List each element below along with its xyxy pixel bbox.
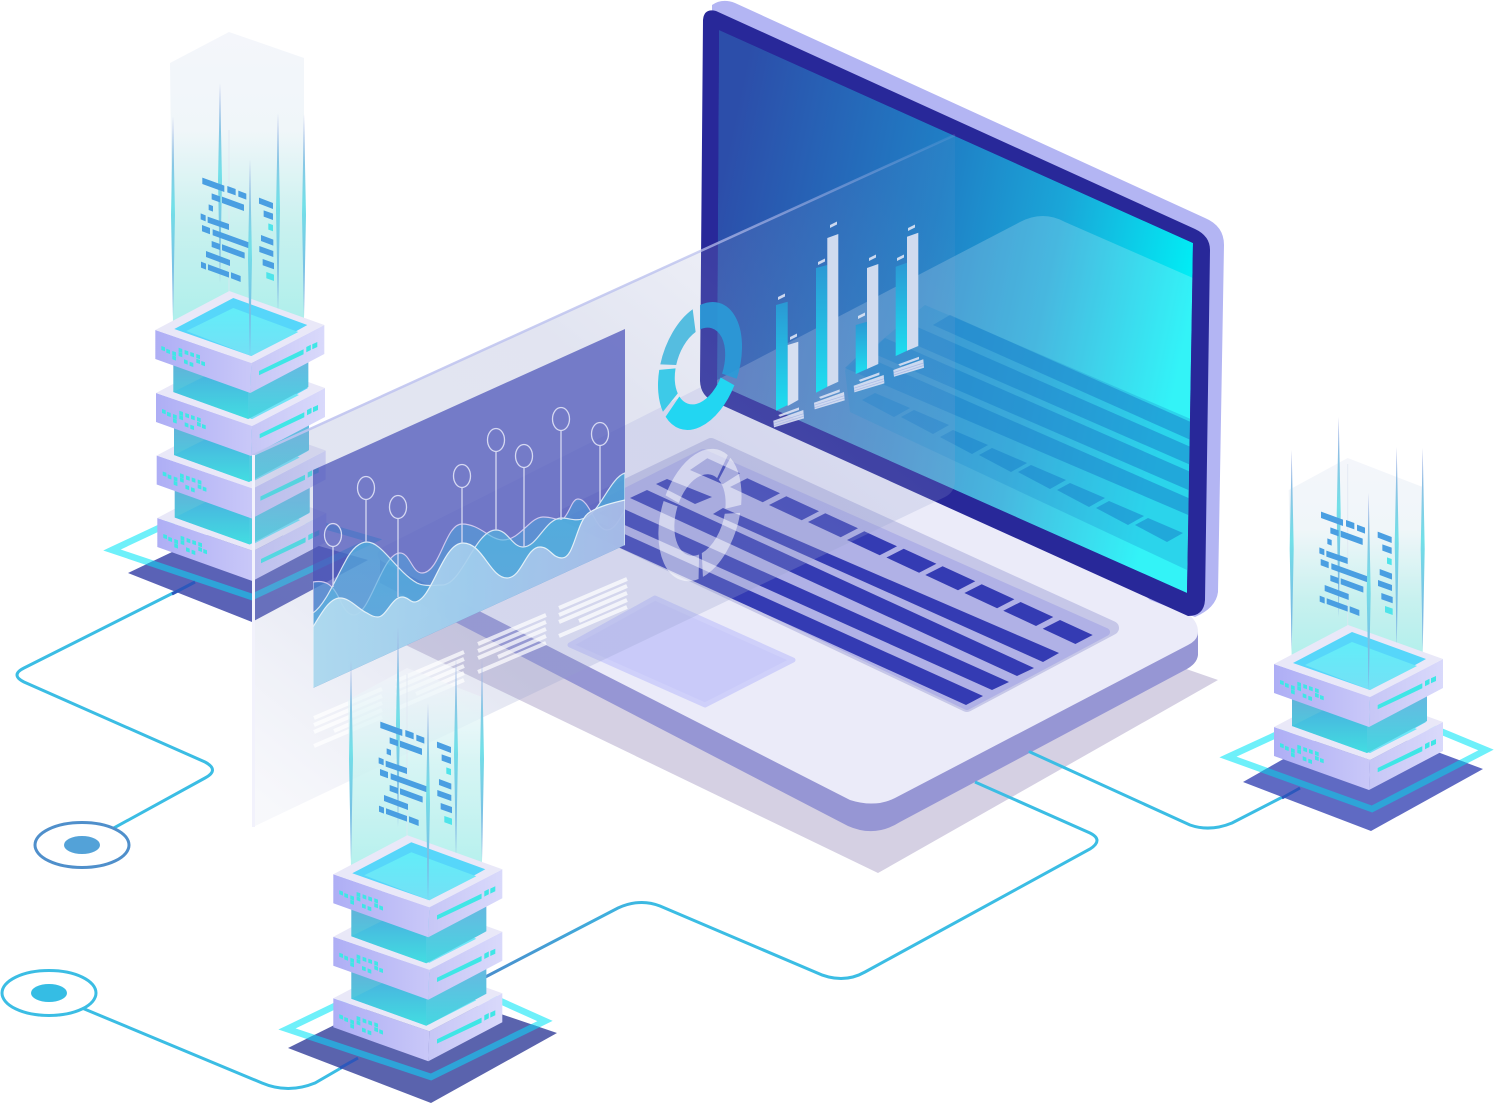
data beam xyxy=(348,627,484,904)
reflected keyboard xyxy=(845,305,1193,570)
node two xyxy=(2,970,96,1016)
laptop base side xyxy=(380,555,1198,831)
server units xyxy=(1274,684,1443,790)
bar axis labels xyxy=(773,357,924,427)
laptop ground shadow xyxy=(385,500,1218,873)
platform xyxy=(287,965,557,1103)
panel text lines xyxy=(314,579,627,746)
platform xyxy=(104,520,382,622)
reflected ring on keyboard xyxy=(666,448,734,582)
screen back lid xyxy=(712,1,1224,617)
keyboard recess xyxy=(566,445,1112,706)
bar value marks xyxy=(778,222,915,340)
area waves xyxy=(313,473,625,700)
connector wires xyxy=(17,582,1300,1088)
data beam xyxy=(1289,417,1425,694)
wire to right server xyxy=(1030,752,1300,828)
server units xyxy=(333,894,502,1061)
top server unit xyxy=(155,159,324,393)
bars xyxy=(776,233,918,411)
server units xyxy=(156,350,326,581)
laptop xyxy=(378,1,1224,831)
reflected laptop base xyxy=(717,216,1193,593)
data beam xyxy=(170,32,306,360)
laptop base top surface xyxy=(378,385,1198,804)
translucent floating panel xyxy=(253,135,955,827)
server stack left xyxy=(112,32,373,622)
keyboard long key rows xyxy=(583,490,1059,705)
screen display xyxy=(717,30,1193,593)
server stack right xyxy=(1228,417,1486,831)
donut chart xyxy=(666,302,734,430)
trackpad xyxy=(570,598,793,705)
top server unit xyxy=(333,703,502,937)
chart pins xyxy=(324,408,608,597)
panel top edge xyxy=(253,135,955,455)
bar chart xyxy=(773,222,924,427)
platform xyxy=(1220,726,1494,831)
panel left edge xyxy=(252,455,255,827)
wire to node one xyxy=(17,582,212,829)
keyboard top key row xyxy=(656,458,1093,644)
top server unit xyxy=(1274,493,1443,727)
node one xyxy=(35,822,129,868)
screen bezel xyxy=(700,10,1210,616)
line chart panel xyxy=(313,329,625,700)
server stack bottom xyxy=(287,627,557,1103)
main wire passing under servers xyxy=(470,782,1097,985)
wire to node two xyxy=(82,1008,360,1088)
